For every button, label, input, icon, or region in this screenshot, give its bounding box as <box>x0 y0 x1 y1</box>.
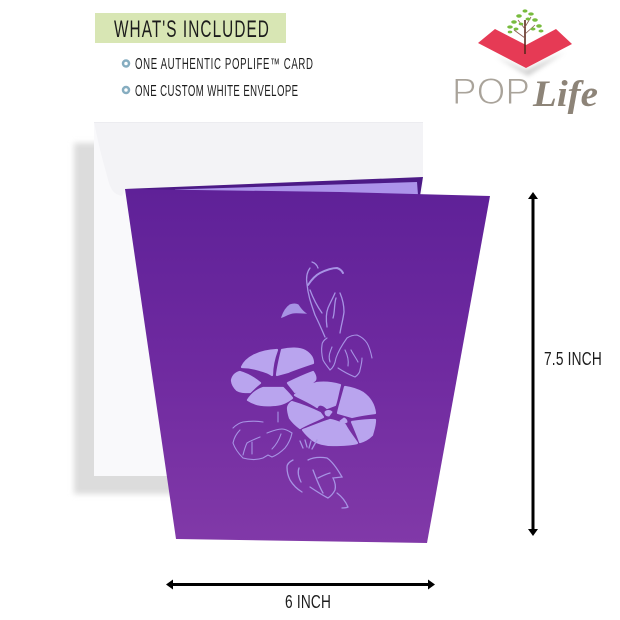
leaves: bottom <box>287 440 348 508</box>
icon: open red book <box>478 29 572 68</box>
envelope shadow <box>74 143 184 494</box>
list: included items <box>123 55 313 100</box>
label: height: 7.5 INCH <box>544 349 602 370</box>
arrow: height <box>528 192 538 536</box>
text: POP: POP <box>452 71 530 112</box>
icon: tree <box>507 9 544 54</box>
icon: bullet 1 <box>123 60 129 66</box>
card front panel <box>125 189 490 543</box>
text: item 2: ONE CUSTOM WHITE ENVELOPE <box>135 82 298 100</box>
card inner lavender <box>175 182 418 195</box>
logo: PopLife <box>452 9 598 115</box>
text: Life: Life <box>532 74 598 115</box>
flower: upper <box>232 349 315 405</box>
icon: logo shadow <box>495 52 565 76</box>
arrow: width <box>166 580 435 590</box>
text: item 1: ONE AUTHENTIC POPLIFE™ CARD <box>135 55 313 73</box>
flower: stem and bud <box>282 262 344 337</box>
label: width: 6 INCH <box>285 592 331 613</box>
leaves: lower left <box>233 412 292 460</box>
envelope <box>94 122 423 476</box>
heading: what's included: WHAT'S INCLUDED <box>114 17 269 43</box>
leaves: upper right <box>322 335 372 377</box>
flower: lower <box>288 383 375 445</box>
icon: bullet 2 <box>123 87 129 93</box>
card back panel <box>125 177 423 196</box>
envelope flap <box>94 122 423 196</box>
